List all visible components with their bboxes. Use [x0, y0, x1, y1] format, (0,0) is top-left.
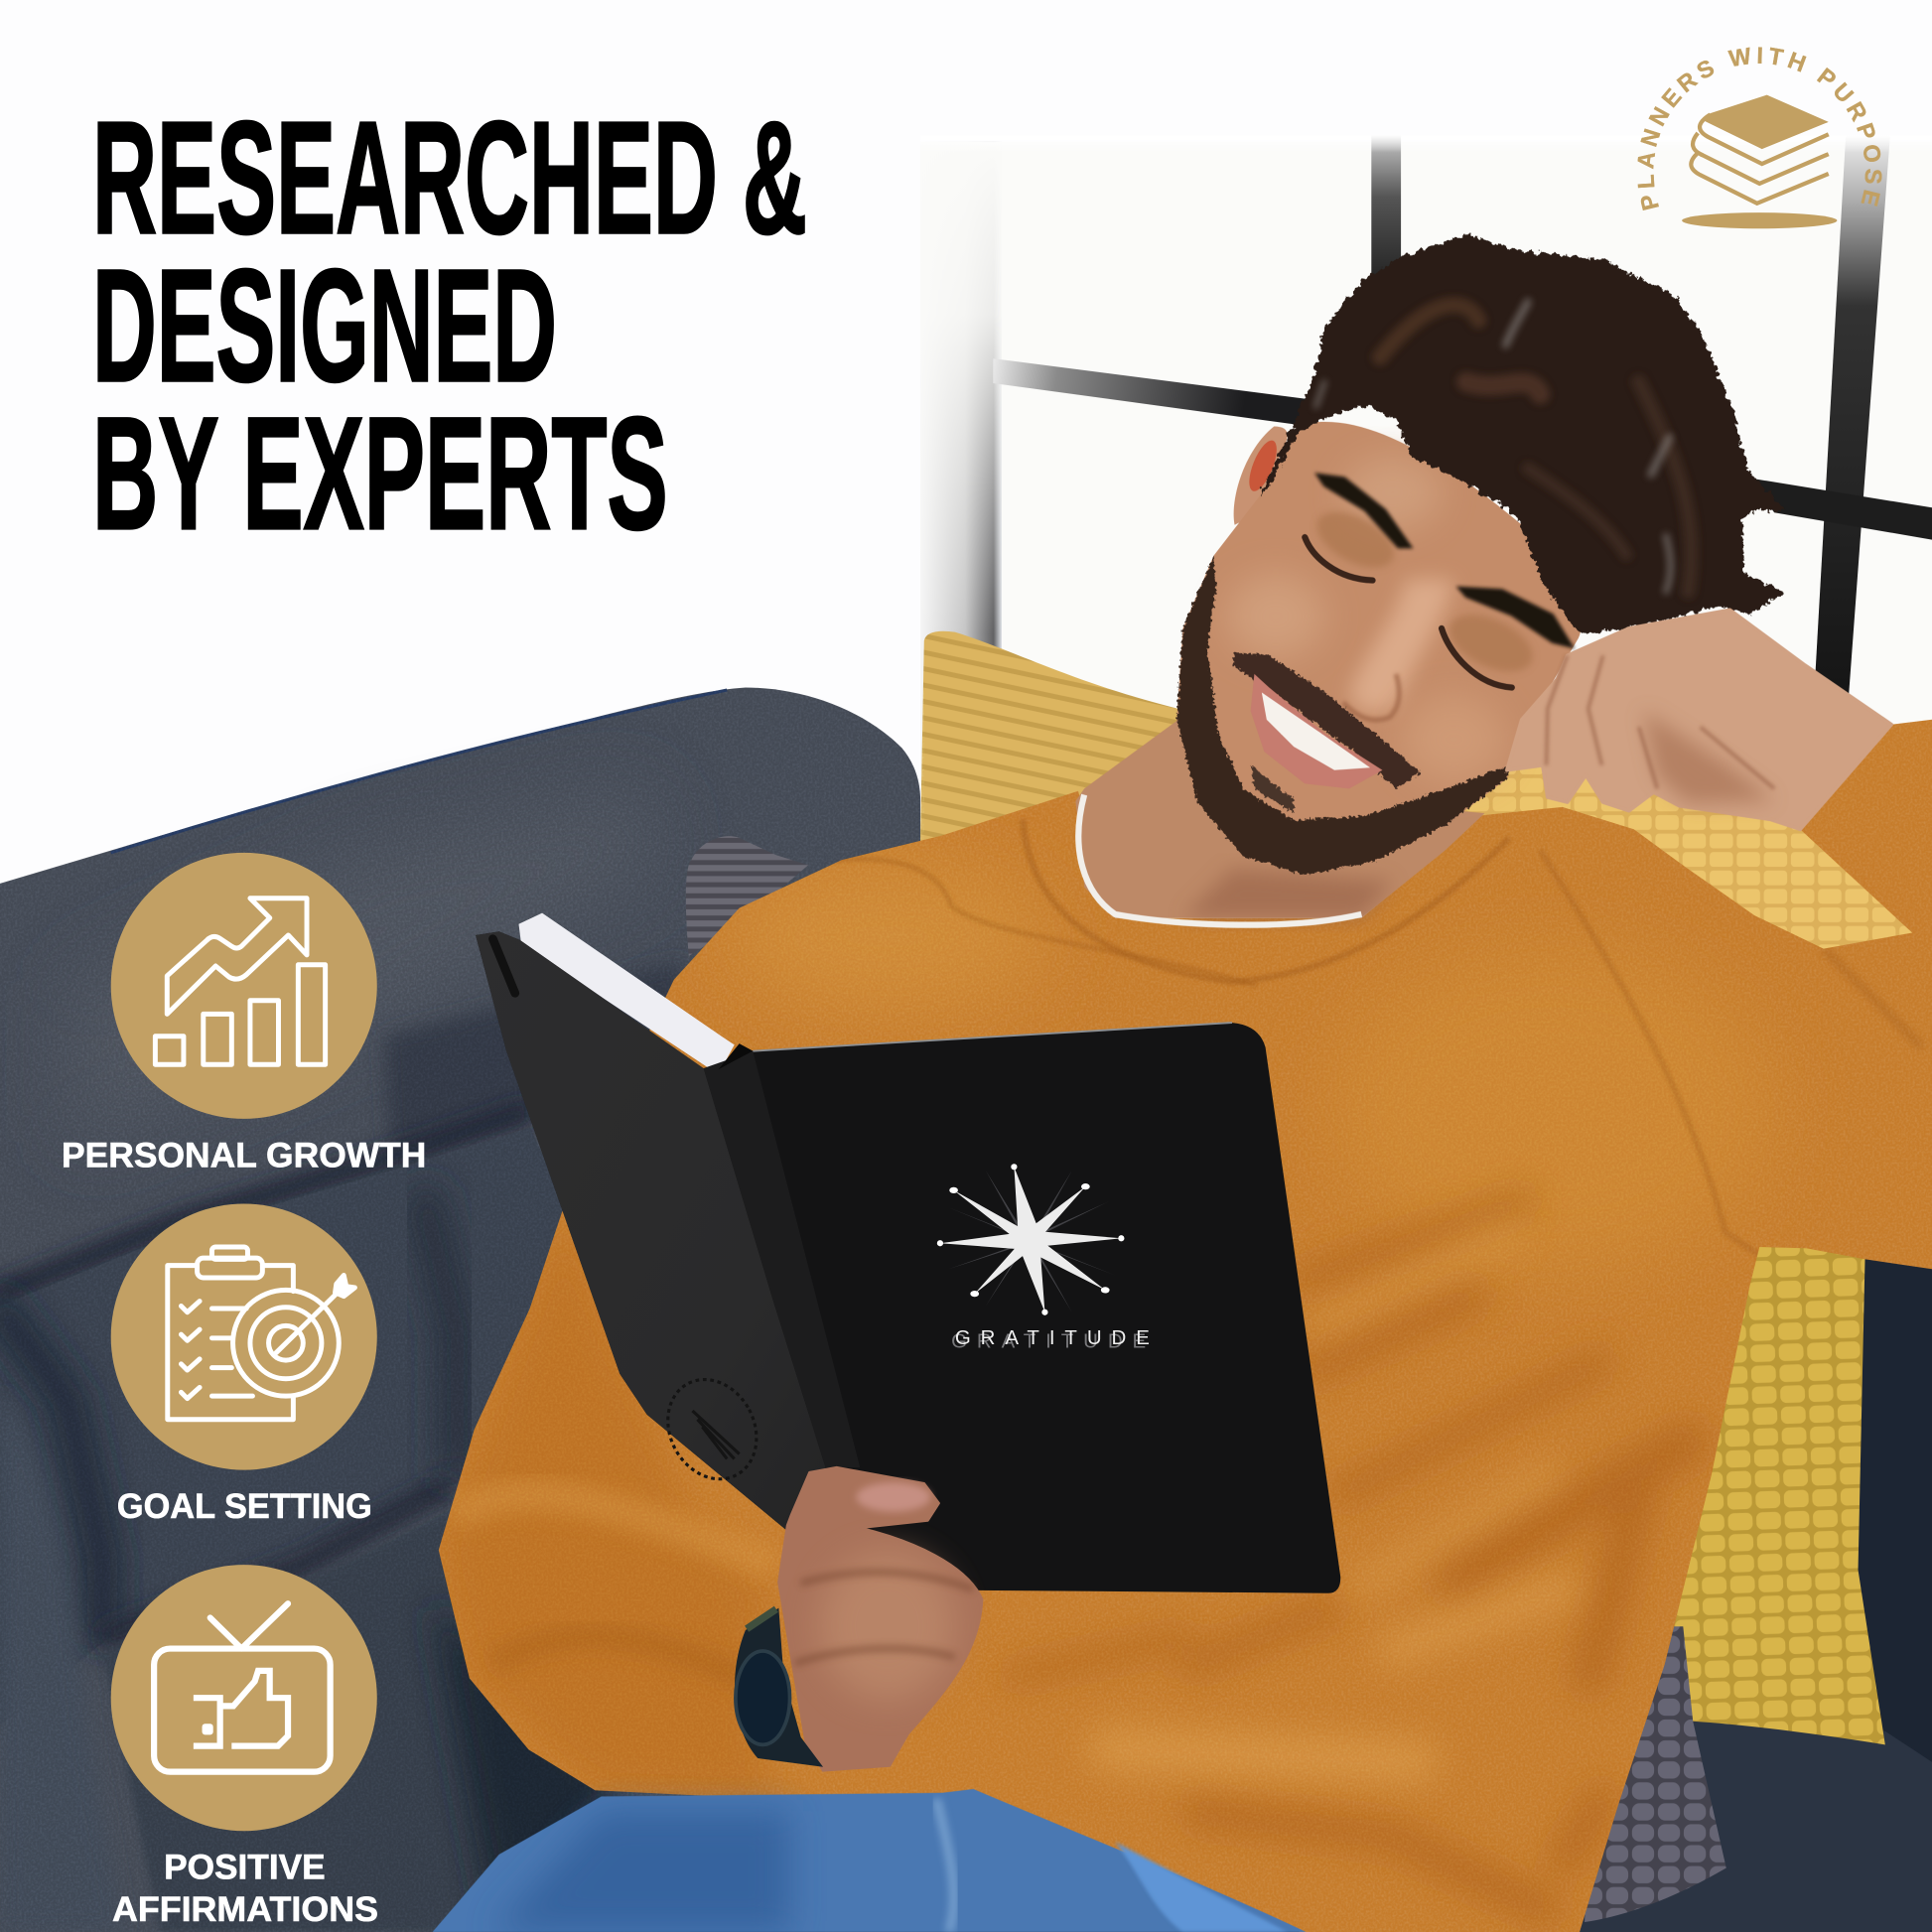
- sweater light areas: [1330, 949, 1774, 1269]
- title: RESEARCHED &: [92, 89, 807, 268]
- book spine emblem: [651, 1364, 773, 1494]
- sofa: [0, 688, 924, 1932]
- grey knitted cushion bottom: [1585, 1626, 1726, 1922]
- lower hand holding book: [778, 1467, 982, 1770]
- back cushion darker tuft: [384, 961, 684, 1157]
- eyebrow left: [1317, 475, 1411, 547]
- hair grey strands: [1315, 302, 1671, 592]
- title: DESIGNED: [92, 236, 557, 415]
- lower seat: [102, 1509, 617, 1932]
- icon: clipboard and target: [168, 1247, 354, 1420]
- beard: [1176, 556, 1507, 875]
- logo books icon: [1691, 95, 1829, 204]
- seat seam lower: [102, 1484, 451, 1639]
- label: PERSONAL GROWTH: [62, 1137, 426, 1174]
- icon: growth chart: [155, 898, 326, 1064]
- yellow cushion left: [919, 631, 1232, 899]
- yellow cushion lower right: [1601, 1238, 1885, 1744]
- sweater: [419, 715, 1932, 1932]
- yellow cushion right: [1405, 752, 1932, 986]
- logo: planners with purpose: [1638, 47, 1882, 228]
- raised hand: [1507, 610, 1891, 829]
- logo arc text: PLANNERS WITH PURPOSE: [1638, 47, 1882, 210]
- label: GOAL SETTING: [117, 1488, 372, 1526]
- wristwatch: [735, 1608, 823, 1767]
- eye right lashes: [1442, 628, 1512, 688]
- feature: positive affirmations: [111, 1565, 378, 1929]
- book spine: [704, 1051, 860, 1467]
- hair: [1259, 234, 1785, 633]
- window: [920, 136, 1932, 794]
- book: cover: [476, 931, 1340, 1593]
- eyebrow right: [1458, 588, 1573, 647]
- jeans: [433, 1789, 1307, 1932]
- sofa right: [1578, 1232, 1932, 1932]
- left arm shading: [439, 1212, 763, 1799]
- eyelid left: [1308, 500, 1403, 579]
- gold circle: [111, 853, 377, 1119]
- feature: personal growth: [62, 853, 426, 1174]
- dark backing under the figure: [517, 1232, 1749, 1932]
- ear: [1234, 426, 1288, 525]
- eyelid right: [1441, 604, 1541, 683]
- sweater diagonal folds dark: [1011, 1201, 1688, 1910]
- gold circle: [111, 1204, 377, 1470]
- collar and seams: [1023, 819, 1509, 982]
- book left cover panel: [476, 931, 826, 1534]
- title: [92, 89, 807, 563]
- face: [1176, 422, 1582, 875]
- grey knitted cushion small: [686, 836, 808, 956]
- mustache: [1233, 652, 1421, 788]
- back and seat seam: [0, 1113, 523, 1293]
- logo shadow ellipse: [1682, 212, 1837, 228]
- label: [112, 1850, 378, 1929]
- feature: goal setting: [111, 1204, 377, 1526]
- icon: tv with thumbs up: [154, 1603, 331, 1772]
- arm tuft shadow: [0, 1309, 102, 1630]
- nose shading: [1343, 674, 1399, 720]
- neck and t-shirt collar: [1075, 721, 1484, 925]
- gratitude cover text: GRATITUDE: [955, 1326, 1150, 1349]
- mouth: [1251, 674, 1382, 788]
- eye left lashes: [1305, 537, 1373, 581]
- compass star: [937, 1164, 1124, 1315]
- hair brown highlights: [1380, 305, 1691, 592]
- label: AFFIRMATIONS: [112, 1891, 378, 1929]
- title: BY EXPERTS: [92, 384, 668, 563]
- gratitude cover text: GRATITUDE: [951, 1330, 1146, 1353]
- gold circle: [111, 1565, 377, 1831]
- seat vertical fold: [421, 1189, 457, 1477]
- sweater diagonal folds light: [1109, 1232, 1565, 1762]
- back cushion highlight: [73, 788, 665, 1146]
- book: pages: [518, 913, 735, 1074]
- label: POSITIVE: [164, 1850, 326, 1887]
